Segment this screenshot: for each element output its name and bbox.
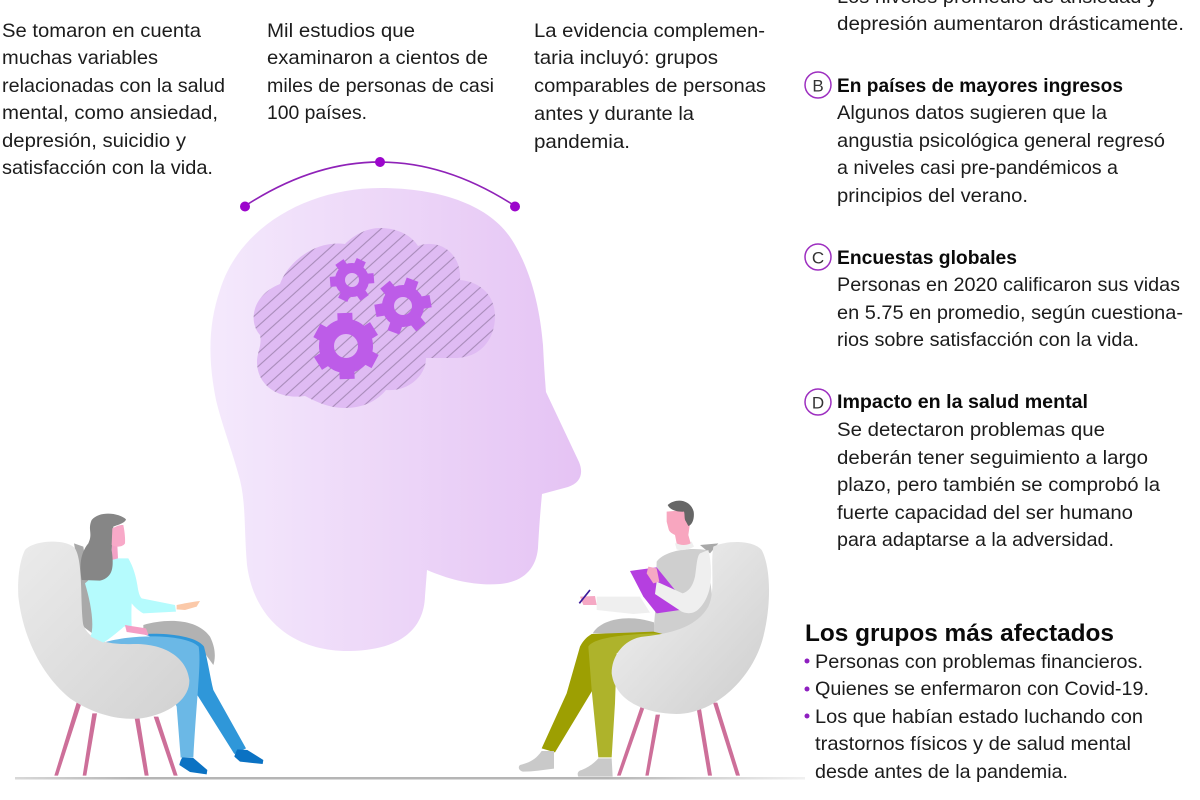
brain with gears: [254, 228, 495, 408]
text block: variables: muchas variables: [2, 47, 158, 69]
gear small: [330, 260, 374, 300]
gear medium: [375, 280, 431, 332]
text block: evidencia complementaria: comparables de personas: [534, 75, 766, 97]
panel: D: Impacto en la salud mental: [837, 391, 1088, 413]
panel: B: Algunos datos sugieren que la: [837, 102, 1107, 124]
panel: B: angustia psicológica general regresó: [837, 130, 1165, 152]
figure: woman in armchair: [18, 514, 263, 776]
list: grupos afectados: Personas con problemas financieros.: [815, 651, 1143, 673]
panel: C: en 5.75 en promedio, según cuestiona-: [837, 302, 1183, 324]
clipboard: [630, 567, 680, 613]
brain cloud: [254, 228, 495, 408]
panel: A continued: [837, 0, 1184, 35]
hair: [668, 501, 694, 526]
badge D: D: [812, 394, 824, 412]
text block: variables: depresión, suicidio y: [2, 130, 186, 152]
text block: estudios: miles de personas de casi: [267, 75, 494, 97]
arc connector with dots: [240, 157, 520, 212]
list: grupos afectados: desde antes de la pandemia.: [815, 761, 1068, 783]
panel: D: deberán tener seguimiento a largo: [837, 447, 1148, 469]
list: grupos afectados: Los que habían estado luchando con: [815, 706, 1143, 728]
chair legs: [617, 703, 740, 776]
text block: estudios: Mil estudios que: [267, 20, 415, 42]
badge B: B: [812, 76, 824, 96]
panel: D: plazo, pero también se comprobó la: [837, 474, 1160, 496]
chair legs: [54, 696, 178, 776]
panel: C: Personas en 2020 calificaron sus vidas: [837, 274, 1180, 296]
chair body: [18, 542, 189, 719]
torso: [85, 558, 176, 643]
panel: B: principios del verano.: [837, 185, 1028, 207]
text block: evidencia complementaria: La evidencia complemen-: [534, 20, 765, 42]
floor line: [15, 777, 805, 780]
text block: variables: [2, 20, 225, 179]
panel: B: En países de mayores ingresos: [837, 75, 1123, 97]
panel: C: rios sobre satisfacción con la vida.: [837, 329, 1139, 351]
panel: D: [805, 389, 1160, 551]
text block: evidencia complementaria: taria incluyó: grupos: [534, 47, 718, 69]
text block: estudios: 100 países.: [267, 102, 367, 124]
text block: variables: satisfacción con la vida.: [2, 157, 213, 179]
text block: variables: mental, como ansiedad,: [2, 102, 218, 124]
panel: C: Encuestas globales: [837, 247, 1017, 269]
text block: estudios: examinaron a cientos de: [267, 47, 488, 69]
panel: D: Se detectaron problemas que: [837, 419, 1105, 441]
heading: los grupos más afectados: Los grupos más afectados: [805, 620, 1114, 647]
figure: man in armchair with clipboard: [519, 501, 769, 777]
list: grupos afectados: trastornos físicos y de salud mental: [815, 733, 1131, 755]
panel: B: [805, 72, 1165, 207]
text block: variables: Se tomaron en cuenta: [2, 20, 201, 42]
panel: B: a niveles casi pre-pandémicos a: [837, 157, 1118, 179]
badge D: [805, 389, 831, 415]
panel: C: [805, 244, 1183, 351]
list: grupos afectados: [804, 651, 1149, 783]
hair: [80, 514, 126, 581]
text block: variables: relacionadas con la salud: [2, 75, 225, 97]
badge C: [805, 244, 831, 270]
torso: [653, 549, 713, 637]
gear large: [317, 313, 375, 379]
panel: D: fuerte capacidad del ser humano: [837, 502, 1133, 524]
text block: estudios: [267, 20, 494, 124]
text block: evidencia complementaria: pandemia.: [534, 131, 630, 153]
panel: A continued: depresión aumentaron drásticamente.: [837, 13, 1184, 35]
head silhouette: [210, 188, 581, 651]
badge B: [805, 72, 831, 98]
badge C: C: [812, 248, 824, 268]
list: grupos afectados: Quienes se enfermaron con Covid-19.: [815, 678, 1149, 700]
chair body: [612, 542, 769, 714]
text block: evidencia complementaria: [534, 20, 766, 153]
arm: [655, 550, 711, 613]
text block: evidencia complementaria: antes y durante la: [534, 103, 694, 125]
panel: D: para adaptarse a la adversidad.: [837, 529, 1114, 551]
